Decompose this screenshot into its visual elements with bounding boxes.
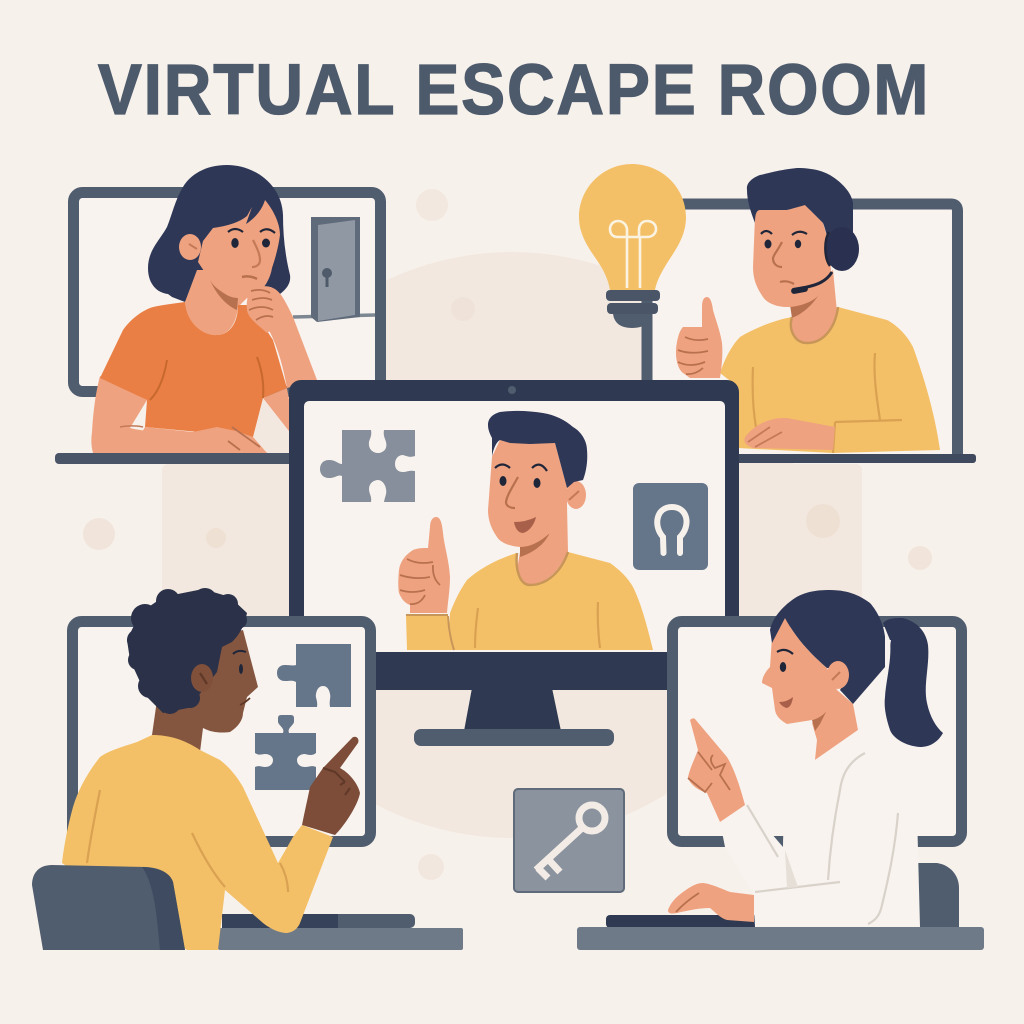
monitor: center xyxy=(289,380,739,690)
desk: top right xyxy=(730,454,976,463)
person: man thumbs up xyxy=(398,411,653,650)
icon: keyhole tile xyxy=(633,483,708,570)
desk: top left xyxy=(55,453,295,464)
monitor: bottom left xyxy=(72,622,370,842)
person: curly hair xyxy=(62,588,360,950)
monitor: top right xyxy=(647,204,958,456)
monitor: top left xyxy=(74,192,380,392)
person: man with headset xyxy=(676,168,940,453)
chair: bottom left xyxy=(32,865,185,950)
icon: door xyxy=(293,217,375,322)
icon: puzzle piece top xyxy=(277,644,351,707)
title: VIRTUAL ESCAPE ROOM xyxy=(98,50,930,130)
monitor: bottom right xyxy=(672,622,962,842)
icon: puzzle piece bottom xyxy=(255,715,316,790)
person: woman with ponytail xyxy=(668,590,943,927)
monitor stand xyxy=(414,688,614,746)
panel: bottom left participant xyxy=(32,588,463,950)
icon: light bulb xyxy=(579,164,686,328)
desk: bottom left xyxy=(218,914,463,950)
panel: bottom right participant xyxy=(577,590,984,950)
panel: center monitor xyxy=(289,380,739,746)
desk: bottom right xyxy=(577,915,984,950)
person: woman thinking xyxy=(91,165,317,453)
panel: top right participant xyxy=(579,164,976,463)
icon: puzzle piece grey xyxy=(320,430,415,502)
panel: top left participant xyxy=(55,165,380,464)
icon: key tile xyxy=(514,789,624,892)
chair: bottom right xyxy=(917,863,959,930)
